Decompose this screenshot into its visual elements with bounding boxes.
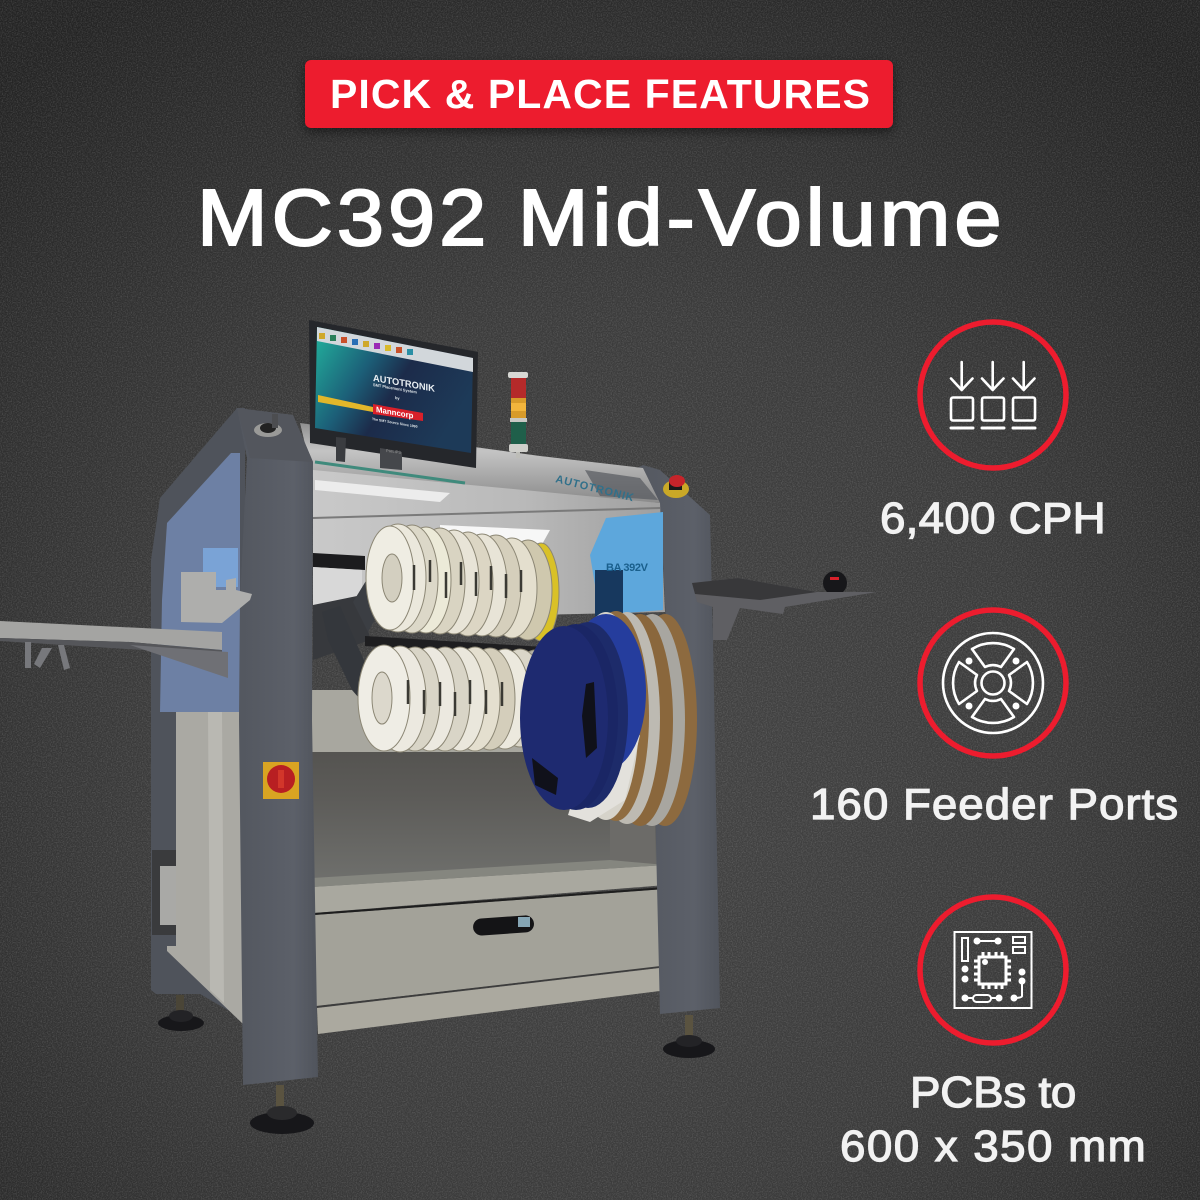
monitor: The SMT Source Since 1990 xyxy=(372,417,418,429)
left bracket xyxy=(181,572,252,623)
back left foot xyxy=(158,995,204,1031)
transparent front window xyxy=(313,470,665,620)
right conveyor xyxy=(692,571,877,640)
lower white reel stack xyxy=(358,645,558,752)
front left foot xyxy=(250,1085,314,1134)
stack light xyxy=(508,372,528,458)
badge: pick and place features xyxy=(305,60,893,132)
left front pillar xyxy=(237,408,318,1085)
monitor: by xyxy=(395,395,400,401)
monitor: AUTOTRONIK xyxy=(373,373,435,395)
top cover and chrome band xyxy=(300,423,660,503)
monitor: Manncorp xyxy=(376,405,414,421)
left side window xyxy=(160,453,240,712)
rotary power switch xyxy=(263,762,299,799)
key lock xyxy=(254,414,282,437)
machine branding text: BA 392V xyxy=(606,562,649,574)
label: 160 Feeder Ports: 160 Feeder Ports xyxy=(810,779,1178,829)
title: MC392 Mid-Volume xyxy=(197,173,1002,262)
label: 6,400 CPH: 6,400 CPH xyxy=(880,493,1106,543)
machine branding text xyxy=(554,473,649,574)
left lower side panel xyxy=(167,712,243,1024)
monitor xyxy=(309,320,478,470)
right pillar xyxy=(633,465,720,1014)
drawer front xyxy=(314,889,666,1006)
label: PCBs to 600 x 350 mm: PCBs to xyxy=(910,1067,1076,1117)
machine photo illustration xyxy=(0,320,877,1134)
upper white reel stack xyxy=(366,524,559,641)
monitor: SMT Placement System xyxy=(373,382,417,395)
monitor: PHILIPS xyxy=(386,448,401,455)
bottom strip xyxy=(317,967,668,1034)
lower cavity xyxy=(305,690,660,900)
brown and white reels xyxy=(573,611,697,826)
machine branding text: AUTOTRONIK xyxy=(554,473,635,504)
label: PCBs to 600 x 350 mm xyxy=(840,1067,1146,1171)
back left pillar and frame xyxy=(151,408,245,1020)
drawer shelf xyxy=(312,865,666,913)
blue window reflection xyxy=(590,512,663,615)
emergency stop button xyxy=(663,475,689,498)
feature: placement rate icon xyxy=(920,322,1066,468)
drawer handle xyxy=(473,915,535,936)
feature: PCB size icon xyxy=(920,897,1066,1043)
right foot xyxy=(663,1015,715,1058)
interior detail xyxy=(313,553,365,570)
feature: feeder ports reel icon xyxy=(920,610,1066,756)
blue reels xyxy=(520,614,646,822)
lower inner panel xyxy=(311,690,530,752)
left conveyor xyxy=(0,621,228,678)
label: PCBs to 600 x 350 mm: 600 x 350 mm xyxy=(840,1121,1146,1171)
badge: pick and place features: PICK & PLACE FEATURES xyxy=(330,71,870,117)
inner light bar xyxy=(440,525,550,548)
hanger plates xyxy=(322,545,560,720)
